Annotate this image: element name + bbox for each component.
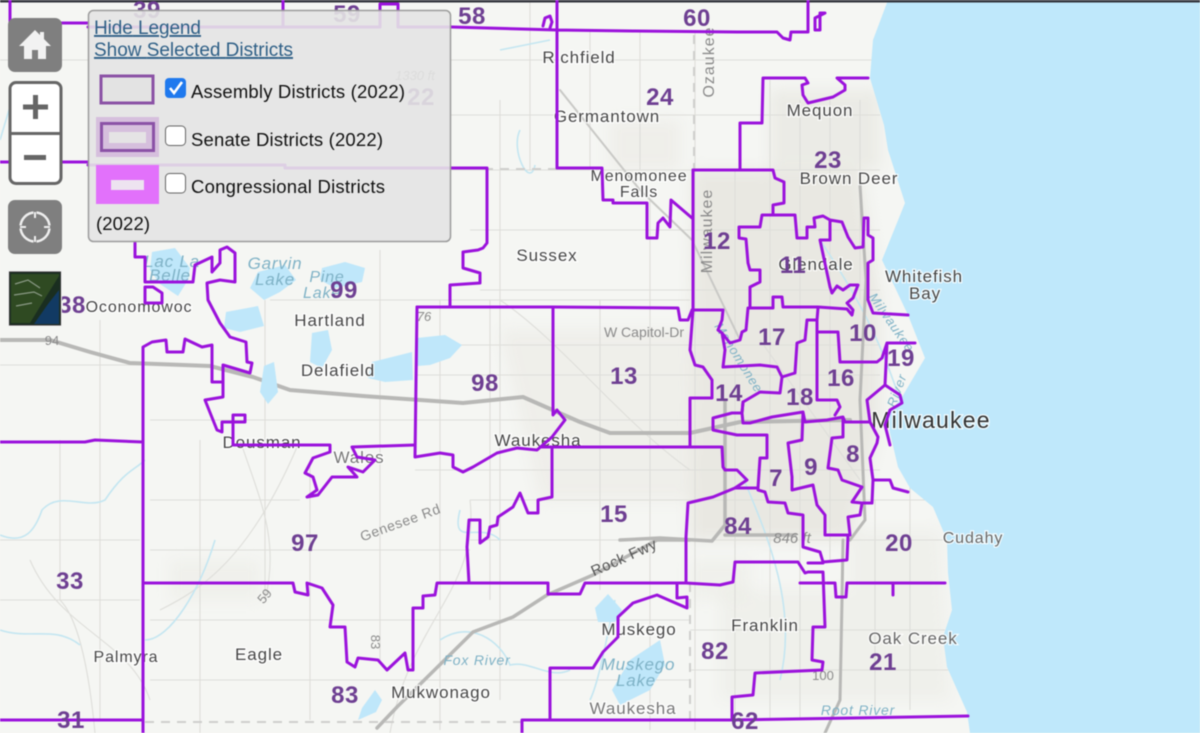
place labels: Falls [620, 184, 658, 201]
legend checkbox: assembly [165, 78, 186, 98]
district numbers: 14 [715, 380, 743, 407]
legend panel [88, 10, 450, 242]
district numbers: 18 [786, 384, 814, 411]
faint labels beneath legend [133, 0, 436, 111]
button: home [8, 18, 62, 72]
urban land areas [170, 90, 950, 700]
water labels: Root River [821, 702, 896, 718]
boundaries: north [0, 0, 868, 320]
road and elevation labels: Genesee Rd [358, 500, 443, 544]
place labels: Oak Creek [868, 629, 958, 648]
place labels [86, 48, 1003, 718]
place labels: Cudahy [943, 530, 1003, 547]
road and elevation labels: 846 ft [773, 530, 812, 547]
road and elevation labels: Rock Fwy [588, 536, 660, 580]
road and elevation labels: 59 [254, 586, 275, 606]
water labels: Fox River [443, 652, 511, 668]
district numbers: 19 [887, 345, 915, 372]
boundaries: west [0, 243, 415, 733]
button: basemap thumbnail [9, 272, 61, 326]
road and elevation labels: 76 [417, 309, 432, 324]
water labels: Belle [149, 266, 191, 285]
district numbers: 20 [885, 530, 913, 557]
water labels: Lake [303, 285, 341, 302]
road and elevation labels: Milwaukee [699, 189, 716, 273]
legend label: assembly: Assembly Districts (2022) [191, 81, 405, 102]
legend label: congressional: Congressional Districts [191, 176, 385, 197]
place labels: Bay [909, 284, 941, 303]
legend checkbox: senate [166, 126, 186, 146]
street grid [0, 0, 950, 733]
Lake Michigan [870, 0, 1200, 733]
place labels: Palmyra [94, 649, 158, 666]
water labels: Lake [616, 671, 656, 690]
road and elevation labels [45, 26, 834, 683]
road and elevation labels: 100 [812, 668, 834, 683]
district numbers: 60 [683, 5, 711, 32]
freeways [0, 0, 866, 733]
water labels: Muskego [601, 655, 675, 674]
water labels: Pine [309, 269, 345, 286]
boundaries: north Milwaukee [690, 170, 908, 488]
button: locate [8, 200, 62, 254]
place labels: Mukwonago [391, 683, 491, 702]
district numbers: 8 [846, 441, 860, 468]
water labels [144, 252, 918, 718]
boundaries: central Milwaukee [742, 308, 915, 562]
rivers [0, 40, 900, 700]
road and elevation labels: Ozaukee [701, 26, 718, 98]
district numbers: 98 [471, 370, 499, 397]
place labels: Eagle [235, 645, 283, 664]
legend swatch: assembly [101, 76, 153, 103]
button: zoom controls [10, 82, 61, 184]
place labels: Waukesha [590, 699, 676, 718]
top window edge [0, 0, 1200, 2]
road and elevation labels: 94 [45, 333, 59, 348]
district numbers: 83 [331, 682, 359, 709]
district numbers: 24 [646, 84, 674, 111]
place labels: Franklin [731, 616, 799, 635]
district numbers: 21 [869, 649, 897, 676]
district numbers: 33 [56, 568, 84, 595]
district numbers [56, 3, 915, 733]
legend swatch: senate [96, 117, 159, 157]
faint labels beneath legend: 22 [407, 84, 435, 111]
place labels: Menomonee [590, 168, 688, 185]
place labels: Richfield [542, 48, 616, 67]
place labels: Germantown [554, 107, 660, 126]
place labels: Dousman [222, 433, 302, 452]
place labels: Milwaukee [871, 407, 991, 433]
water labels: Milwaukee [866, 290, 918, 355]
place labels: Muskego [601, 620, 677, 639]
place labels: Hartland [294, 311, 366, 330]
district numbers: 99 [330, 277, 358, 304]
water labels: Lac La [144, 252, 200, 271]
district numbers: 84 [724, 513, 752, 540]
place labels: Sussex [516, 246, 578, 265]
district numbers: 7 [769, 465, 783, 492]
district numbers: 11 [780, 252, 806, 279]
district numbers: 13 [610, 363, 638, 390]
water labels: Garvin [248, 254, 302, 273]
district numbers: 17 [758, 324, 786, 351]
water labels: Lake [255, 270, 295, 289]
place labels: Delafield [301, 361, 375, 380]
district numbers: 23 [814, 147, 842, 174]
legend link: hide legend: Hide Legend [94, 18, 201, 39]
district numbers: 9 [804, 454, 818, 481]
inland lakes [150, 248, 665, 720]
district numbers: 15 [600, 501, 628, 528]
district numbers: 38 [58, 292, 86, 319]
place labels: Waukesha [495, 431, 581, 450]
legend label: year wrap: (2022) [96, 213, 150, 234]
place labels: Brown Deer [800, 169, 898, 188]
water labels: River [884, 372, 910, 409]
boundaries: Waukesha county [143, 307, 689, 719]
water labels: Menomonee [711, 320, 766, 395]
county line [145, 35, 694, 722]
faint labels beneath legend: 59 [333, 1, 361, 28]
district numbers: 16 [827, 365, 855, 392]
road and elevation labels: W Capitol-Dr [604, 324, 684, 340]
place labels: Oconomowoc [86, 299, 192, 316]
legend swatch: congressional [96, 165, 159, 204]
place labels: Glendale [778, 255, 854, 274]
district numbers: 10 [849, 320, 877, 347]
faint labels beneath legend: 1330 ft [395, 68, 436, 83]
place labels: Mequon [787, 101, 853, 120]
district numbers: 12 [703, 228, 731, 255]
place labels: Wales [333, 448, 385, 467]
legend checkbox: congressional [166, 174, 186, 193]
place labels: Whitefish [885, 267, 963, 286]
district numbers: 58 [458, 3, 486, 30]
road and elevation labels: 83 [368, 635, 383, 649]
district numbers: 97 [291, 530, 319, 557]
boundaries: south Milwaukee [522, 488, 968, 733]
legend link: show selected districts: Show Selected Districts [94, 40, 293, 61]
district numbers: 82 [701, 638, 729, 665]
legend label: senate: Senate Districts (2022) [191, 129, 383, 150]
